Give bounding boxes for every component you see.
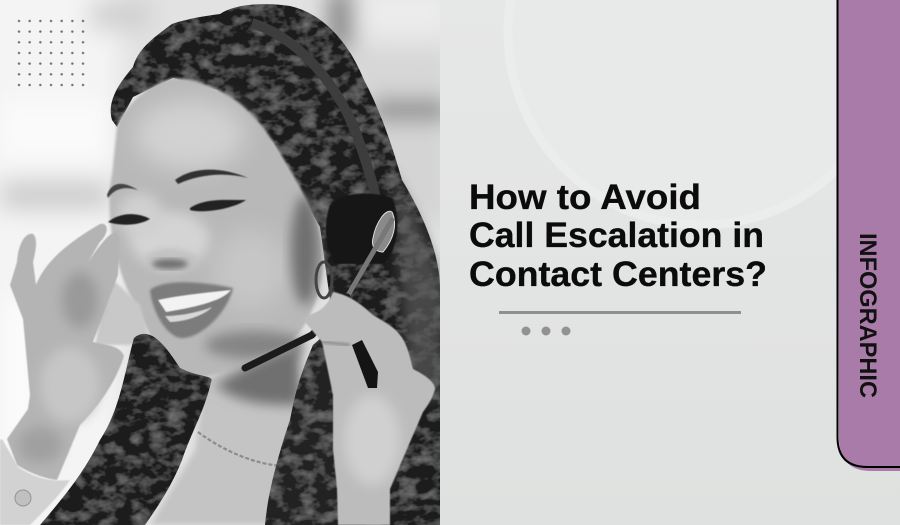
hair top bbox=[111, 4, 445, 525]
sleeve bbox=[0, 439, 70, 525]
title: Contact Centers? bbox=[469, 255, 767, 294]
dark gap between fingers bbox=[352, 340, 378, 388]
decorative ring bbox=[675, 227, 728, 230]
neck and chest bbox=[150, 345, 305, 525]
necklace bbox=[198, 432, 285, 466]
left hand bbox=[7, 224, 124, 480]
photo: woman wearing a headset bbox=[0, 0, 450, 525]
lips bbox=[150, 282, 233, 338]
hair curls on left shoulder bbox=[40, 334, 212, 525]
divider line bbox=[499, 311, 741, 314]
eyes bbox=[190, 200, 246, 211]
light area between hand and face bbox=[95, 275, 148, 345]
eyebrows bbox=[175, 170, 248, 184]
headset bbox=[245, 23, 397, 368]
face bbox=[107, 78, 323, 377]
dot grid bbox=[14, 16, 89, 91]
title: Call Escalation in bbox=[469, 216, 764, 255]
title bbox=[469, 178, 767, 294]
teeth bbox=[158, 290, 231, 312]
right hand bbox=[305, 292, 435, 525]
right background panel bbox=[440, 0, 900, 525]
tab label: INFOGRAPHIC bbox=[854, 233, 881, 398]
hair strands beside right hand bbox=[265, 338, 321, 525]
three dots bbox=[522, 326, 570, 336]
infographic tab bbox=[838, 0, 900, 471]
nose bbox=[148, 248, 194, 261]
title: How to Avoid bbox=[469, 178, 701, 217]
